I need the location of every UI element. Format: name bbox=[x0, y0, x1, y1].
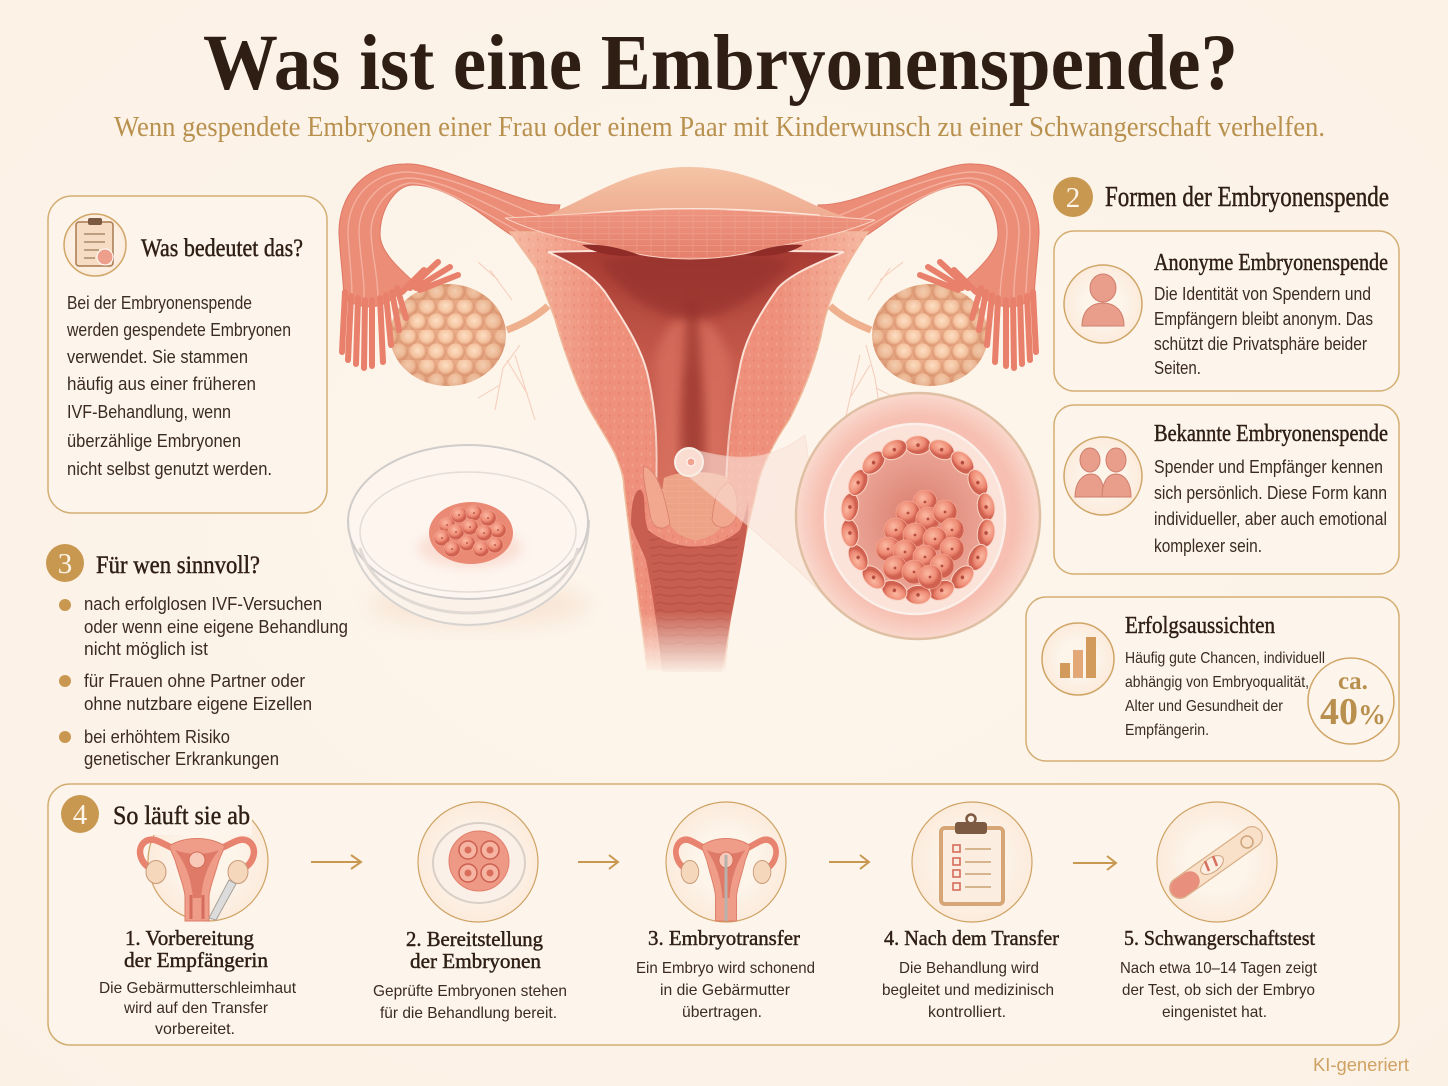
step 4 text: kontrolliert. bbox=[928, 1004, 1006, 1021]
body text: nicht selbst genutzt werden. bbox=[67, 459, 272, 479]
body text bbox=[66, 293, 291, 479]
step 4 text: Die Behandlung wird bbox=[899, 960, 1039, 977]
illustration: petri dish with embryo bbox=[348, 445, 590, 627]
body text: Häufig gute Chancen, individuell bbox=[1125, 650, 1325, 667]
heading: Was bedeutet das? bbox=[141, 235, 303, 262]
dish wall bbox=[349, 520, 589, 625]
step 5 text: 5. Schwangerschaftstest bbox=[1124, 926, 1315, 950]
bullet list: oder wenn eine eigene Behandlung bbox=[84, 617, 348, 637]
zona pellucida bbox=[825, 424, 1005, 614]
body text: sich persönlich. Diese Form kann bbox=[1154, 483, 1387, 503]
heading: Formen der Embryonenspende bbox=[1105, 182, 1389, 213]
success rate badge: 40% bbox=[1320, 691, 1386, 733]
step 5 icon: pregnancy test bbox=[1157, 802, 1277, 922]
cavity corners bbox=[582, 245, 803, 256]
number badge 3 bbox=[46, 544, 84, 582]
vaginal ribs bbox=[648, 530, 740, 672]
step 1 text: vorbereitet. bbox=[155, 1021, 235, 1038]
uterine cavity bbox=[548, 250, 844, 490]
step 3 text: übertragen. bbox=[682, 1004, 762, 1021]
blastocyst cavity bbox=[850, 447, 986, 593]
section: Für wen sinnvoll bbox=[46, 544, 348, 769]
success rate badge: ca. bbox=[1338, 668, 1368, 695]
badge and heading: So läuft sie ab bbox=[113, 801, 250, 830]
veins bbox=[478, 262, 903, 420]
icon: bar chart bbox=[1042, 623, 1114, 695]
success rate badge bbox=[1308, 658, 1394, 744]
cervix bbox=[662, 472, 731, 540]
bullet list: nach erfolglosen IVF-Versuchen bbox=[84, 594, 322, 614]
step 3 text: 3. Embryotransfer bbox=[648, 926, 800, 950]
panel: Anonyme Embryonenspende bbox=[1054, 231, 1399, 391]
mini uterus 3 bbox=[676, 838, 776, 921]
body text: komplexer sein. bbox=[1154, 536, 1262, 556]
body text: abhängig von Embryoqualität, bbox=[1125, 674, 1309, 691]
arrow 2 bbox=[578, 855, 618, 869]
bullet list bbox=[59, 594, 348, 769]
step 2 text bbox=[373, 927, 567, 1022]
step 1 text: Die Gebärmutterschleimhaut bbox=[99, 980, 297, 997]
step 2 text: der Embryonen bbox=[410, 949, 541, 973]
body text: häufig aus einer früheren bbox=[67, 374, 256, 394]
step 1 text bbox=[99, 926, 297, 1038]
lower fade bbox=[620, 610, 750, 675]
body text: Empfängern bleibt anonym. Das bbox=[1154, 309, 1373, 329]
embryo in dish bbox=[429, 502, 513, 564]
badge and heading: 4 bbox=[73, 799, 88, 831]
syringe bbox=[209, 880, 236, 920]
inner cell mass bbox=[876, 490, 964, 589]
dish rim bbox=[348, 445, 588, 599]
step 1 text: der Empfängerin bbox=[124, 948, 268, 972]
arrow 3 bbox=[829, 855, 869, 869]
bullet list: bei erhöhtem Risiko bbox=[84, 727, 230, 747]
step 2 text: für die Behandlung bereit. bbox=[380, 1005, 557, 1022]
body text: Empfängerin. bbox=[1125, 722, 1209, 739]
step 5 text: eingenistet hat. bbox=[1162, 1004, 1267, 1021]
right fallopian tube and ovary bbox=[818, 164, 1039, 386]
step 3 text: in die Gebärmutter bbox=[660, 982, 791, 999]
step 1 text: wird auf den Transfer bbox=[123, 1000, 269, 1017]
body text: Alter und Gesundheit der bbox=[1125, 698, 1284, 715]
number badge 2 bbox=[1053, 177, 1093, 217]
step 2 icon bbox=[418, 802, 538, 922]
magnified embryo circle bbox=[796, 393, 1040, 639]
cervical lips bbox=[644, 466, 737, 528]
body text: Spender und Empfänger kennen bbox=[1154, 457, 1383, 477]
subtitle: Wenn gespendete Embryonen einer Frau oder einem Paar mit Kinderwunsch zu einer Schwangerschaft verhelfen. bbox=[114, 112, 1325, 143]
heading: Für wen sinnvoll? bbox=[96, 552, 260, 579]
icon: person bbox=[1064, 265, 1142, 343]
magnifier cone bbox=[688, 435, 828, 600]
uterus outer body and vagina bbox=[510, 232, 868, 670]
section: Formen heading bbox=[1053, 177, 1389, 217]
catheter bbox=[724, 855, 728, 921]
step 3 icon bbox=[666, 802, 786, 922]
uterine fundus dome bbox=[530, 167, 850, 220]
heading: Erfolgsaussichten bbox=[1125, 613, 1275, 639]
vaginal canal bbox=[631, 490, 748, 672]
magnifier origin point bbox=[675, 448, 703, 476]
bullet list: nicht möglich ist bbox=[84, 639, 208, 659]
step 2 text: Geprüfte Embryonen stehen bbox=[373, 983, 567, 1000]
step 2 text: 2. Bereitstellung bbox=[406, 927, 543, 951]
body text bbox=[1154, 284, 1373, 378]
body text bbox=[1154, 457, 1387, 556]
body text: Die Identität von Spendern und bbox=[1154, 284, 1371, 304]
arrow 1 bbox=[311, 855, 361, 869]
illustration: uterus anatomy bbox=[339, 164, 1039, 675]
step 5 text: der Test, ob sich der Embryo bbox=[1122, 982, 1315, 999]
arrow 4 bbox=[1073, 856, 1116, 870]
trophoblast ring bbox=[839, 436, 997, 604]
panel: Was bedeutet das bbox=[48, 196, 327, 513]
panel: So läuft sie ab bbox=[48, 784, 1399, 1045]
body text: individueller, aber auch emotional bbox=[1154, 509, 1387, 529]
body text: werden gespendete Embryonen bbox=[66, 320, 291, 340]
badge and heading bbox=[61, 795, 250, 833]
mini uterus 1 bbox=[140, 838, 254, 921]
body text: IVF-Behandlung, wenn bbox=[67, 402, 231, 422]
title: Was ist eine Embryonenspende? bbox=[203, 20, 1238, 107]
step 3 text: Ein Embryo wird schonend bbox=[636, 960, 815, 977]
body text: Seiten. bbox=[1154, 358, 1201, 378]
front muscle band bbox=[505, 209, 875, 259]
body text: Bei der Embryonenspende bbox=[67, 293, 252, 313]
icon: clipboard bbox=[64, 214, 126, 276]
step 4 text: begleitet und medizinisch bbox=[882, 982, 1054, 999]
muscle wall texture bbox=[510, 232, 868, 670]
step 4 icon: clipboard bbox=[912, 802, 1032, 922]
step 1 icon bbox=[120, 795, 268, 921]
step 5 text: Nach etwa 10–14 Tagen zeigt bbox=[1120, 960, 1318, 977]
central slit bbox=[681, 300, 705, 480]
step 5 text bbox=[1120, 926, 1318, 1021]
cavity inner folds bbox=[655, 315, 732, 488]
footer note: KI-generiert bbox=[1313, 1055, 1409, 1075]
panel: Erfolgsaussichten bbox=[1026, 597, 1399, 761]
icon: two people bbox=[1064, 437, 1142, 515]
heading: Bekannte Embryonenspende bbox=[1154, 421, 1388, 447]
heading: Anonyme Embryonenspende bbox=[1154, 250, 1388, 276]
body text: schützt die Privatsphäre beider bbox=[1154, 334, 1367, 354]
body text: verwendet. Sie stammen bbox=[67, 347, 248, 367]
number badge 2: 2 bbox=[1066, 182, 1080, 214]
bullet list: ohne nutzbare eigene Eizellen bbox=[84, 694, 312, 714]
step 4 text bbox=[882, 926, 1059, 1021]
bullet list: für Frauen ohne Partner oder bbox=[84, 671, 305, 691]
cavity top shadow bbox=[600, 253, 790, 320]
bullet list: genetischer Erkrankungen bbox=[84, 749, 279, 769]
body text bbox=[1125, 650, 1325, 739]
step 1 text: 1. Vorbereitung bbox=[125, 926, 254, 950]
step 3 text bbox=[636, 926, 815, 1021]
body text: überzählige Embryonen bbox=[67, 431, 241, 451]
panel: Bekannte Embryonenspende bbox=[1054, 405, 1399, 574]
step 4 text: 4. Nach dem Transfer bbox=[884, 926, 1059, 950]
number badge 3: 3 bbox=[58, 548, 72, 580]
left fallopian tube and ovary bbox=[339, 164, 560, 386]
